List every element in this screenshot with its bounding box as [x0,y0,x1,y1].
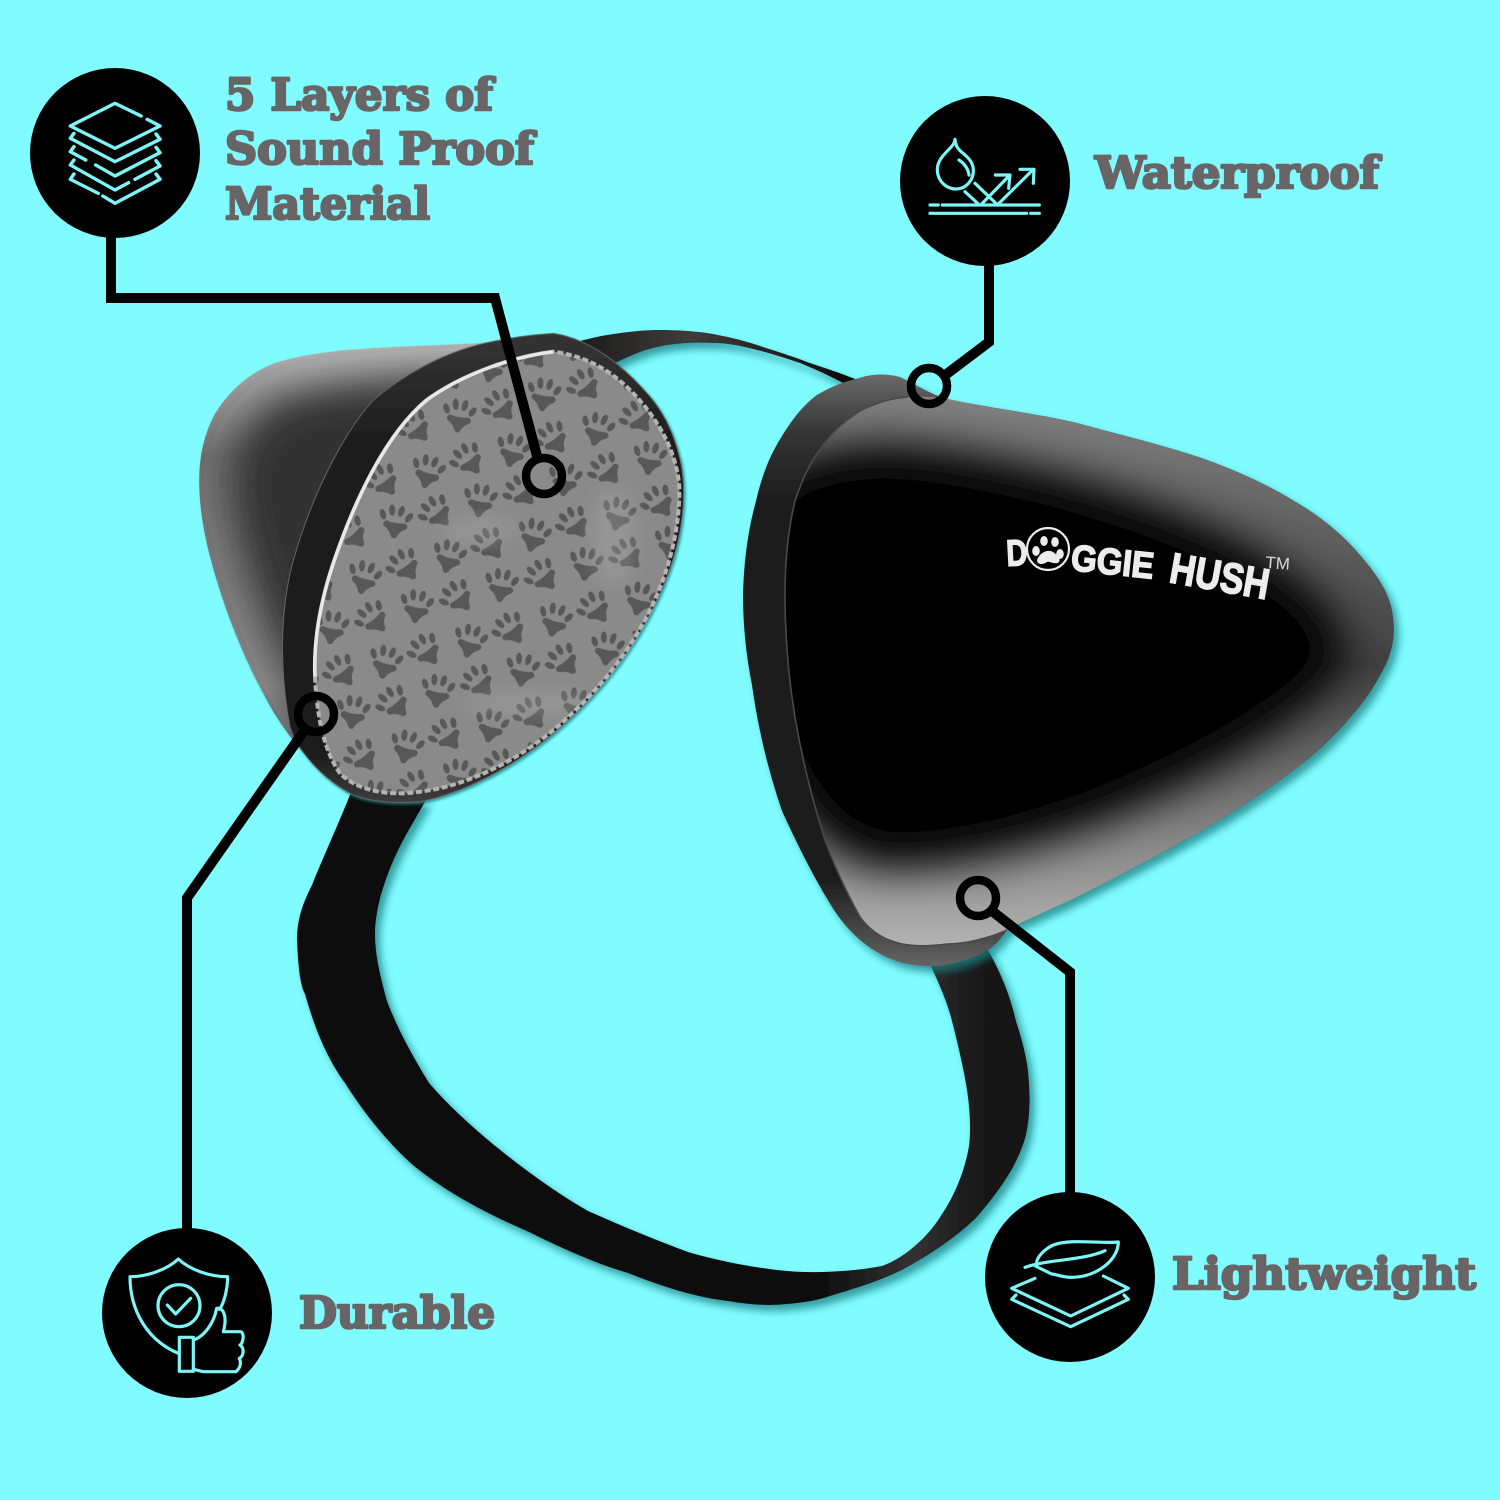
leader line: lightweight [960,880,1070,1197]
badge: durable [102,1228,272,1398]
logo text GGIE: GGIE [1069,537,1156,587]
heading: 5 layers of sound proof material: 5 Layers of [225,70,496,121]
badge: lightweight [985,1192,1155,1362]
label: lightweight: Lightweight [1172,1249,1477,1300]
logo text HUSH: HUSH [1166,545,1273,609]
heading: 5 layers of sound proof material: Material [225,179,430,230]
label: waterproof: Waterproof [1094,148,1382,199]
right cup shell [786,396,1394,945]
badge: 5 layers [30,68,200,238]
leader line: waterproof [911,262,989,404]
brand logo: Doggie Hush [1005,528,1291,609]
icon: stacked layers [70,103,160,203]
left cup rim band [282,333,684,802]
right ear cup [740,370,1400,970]
icon: feather and sheets [1012,1242,1128,1327]
icon: water drop and arrows [930,139,1039,213]
lower strap [297,790,1030,1305]
logo trademark: TM [1265,553,1291,574]
heading: 5 layers of sound proof material: Sound Proof [225,124,537,175]
left cup dome [199,342,484,750]
left ear cup [199,332,688,806]
logo letter D: D [1005,532,1028,574]
logo paw ring [1027,528,1069,570]
right cup rim [743,375,1394,966]
icon: shield and thumbs up [130,1259,243,1372]
leader line: 5 layers [111,232,562,494]
left cup paw-print lining [315,352,679,793]
badge: waterproof [900,96,1070,266]
leader line: durable [187,696,334,1235]
heading: 5 layers of sound proof material [225,70,537,230]
label: durable: Durable [299,1288,495,1339]
upper strap [557,330,858,384]
